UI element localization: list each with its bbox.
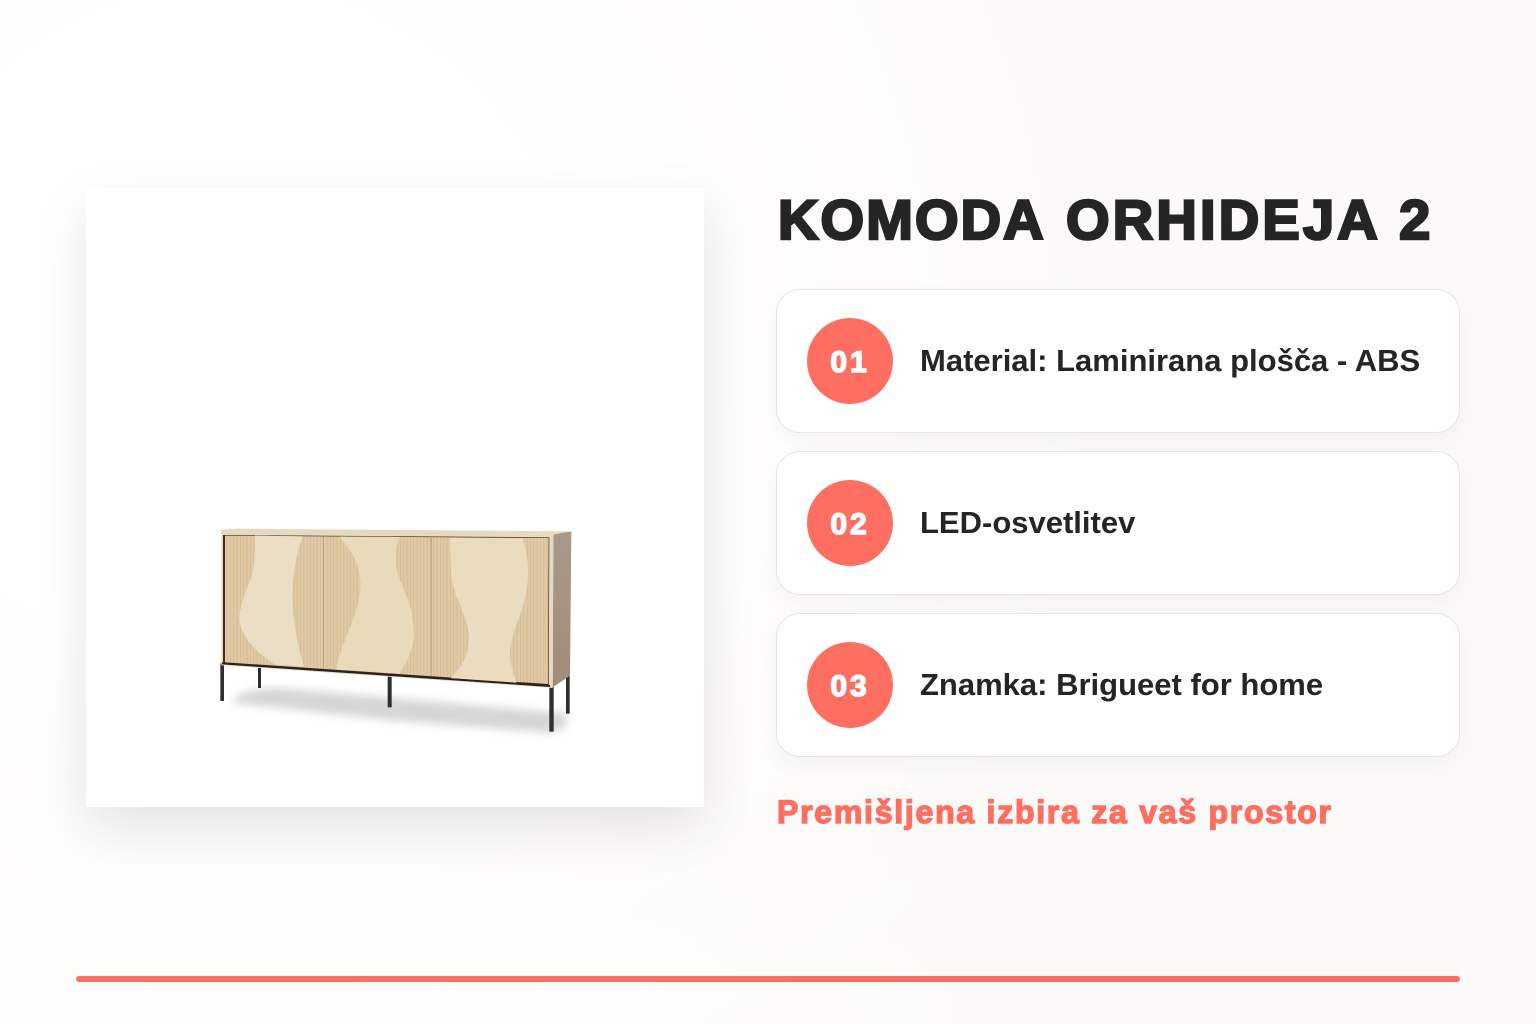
wave panel 2 (337, 536, 414, 674)
front legs (220, 663, 224, 701)
side face (553, 531, 571, 687)
ribbed door base (225, 536, 549, 684)
tagline: Premišljena izbira za vaš prostor (777, 794, 1333, 830)
panel: product image (86, 188, 704, 807)
number badge 01 (807, 318, 893, 404)
number badge 03: 03 (830, 670, 870, 703)
number badge 01: 01 (830, 346, 870, 379)
text: brand: Znamka: Brigueet for home (920, 667, 1323, 702)
number badge 02: 02 (830, 508, 870, 541)
door dividers (323, 537, 431, 676)
back legs (258, 666, 261, 688)
wave panel 1 (239, 536, 304, 667)
title: KOMODA ORHIDEJA 2 (778, 188, 1433, 251)
panel: card 02 (776, 451, 1460, 595)
number badge 02 (807, 480, 893, 566)
icon: sideboard illustration (220, 529, 571, 733)
front frame (221, 533, 553, 688)
footer accent line (76, 976, 1460, 982)
text: material: Material: Laminirana plošča - ABS (920, 343, 1420, 378)
bottom rail (222, 663, 550, 686)
panel: card 03 (776, 613, 1460, 757)
wave panel 3 (450, 538, 528, 683)
number badge 03 (807, 642, 893, 728)
floor shadow (232, 688, 567, 733)
text: LED lighting: LED-osvetlitev (920, 505, 1135, 540)
panel: card 01 (776, 289, 1460, 433)
top surface (221, 529, 571, 535)
